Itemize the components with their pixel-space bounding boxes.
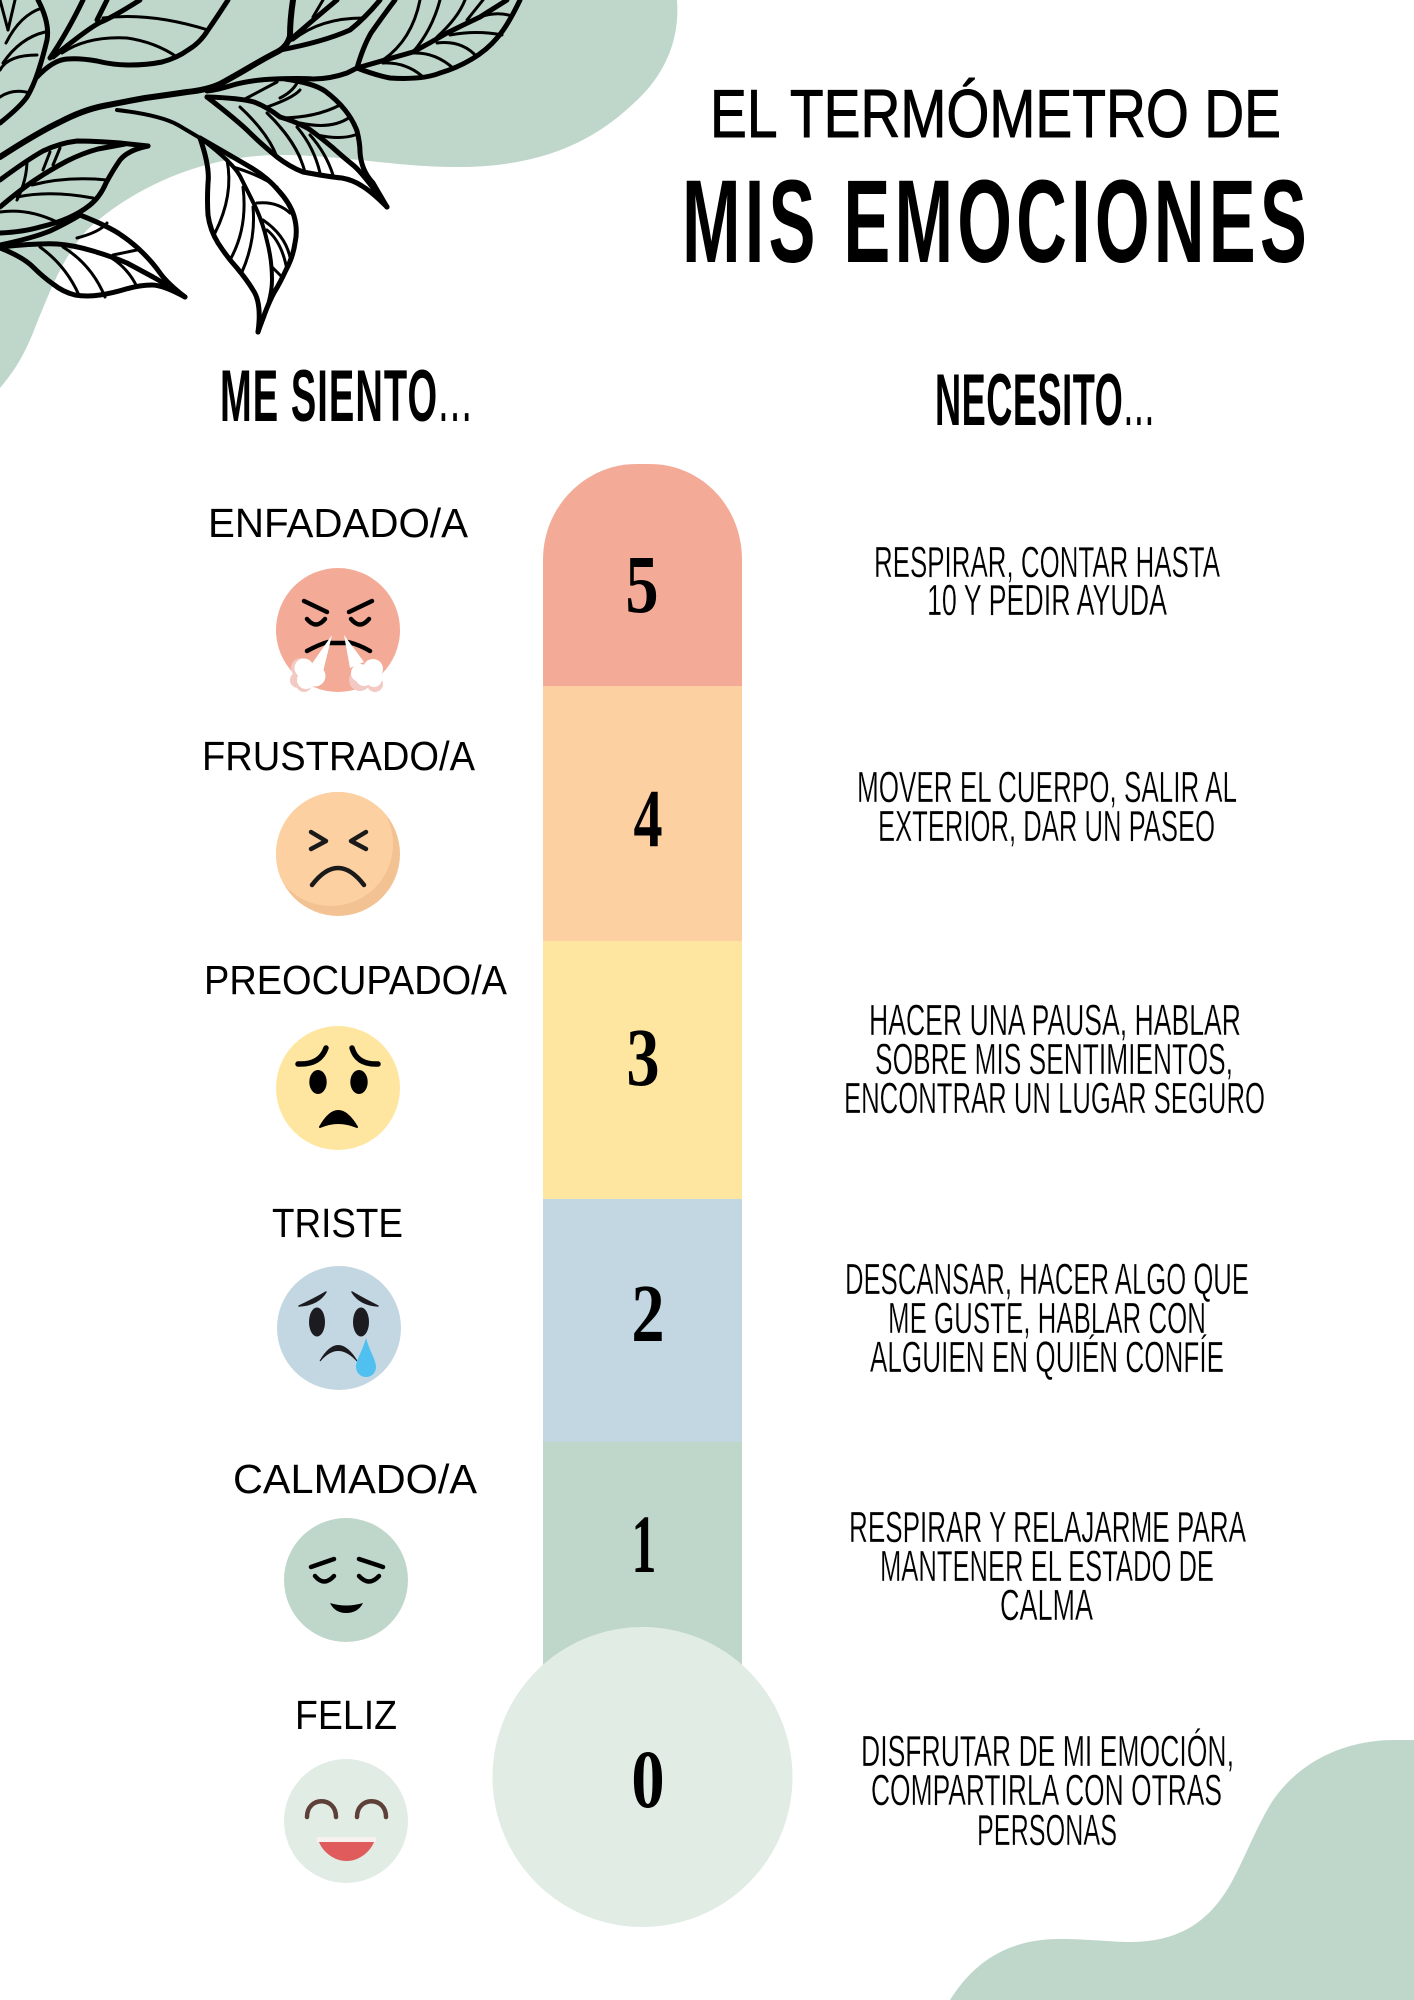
row: feliz: [284, 1692, 408, 1883]
number 0: 0: [631, 1734, 665, 1826]
leaf illustration: [0, 0, 520, 332]
number 2: 2: [631, 1268, 665, 1360]
text: need level 0: [861, 1727, 1234, 1855]
level 5 band: [543, 464, 742, 686]
text: need level 2: [845, 1255, 1249, 1382]
number 1: 1: [632, 1498, 656, 1590]
row: preocupado: [204, 957, 508, 1150]
label: PREOCUPADO/A: [204, 957, 508, 1003]
number 3: 3: [626, 1012, 660, 1104]
icon: calm face: [284, 1518, 408, 1642]
text: need level 4: [857, 763, 1237, 851]
icon: sad face: [277, 1266, 401, 1390]
text: need level 1: [849, 1503, 1246, 1630]
heading: me siento: ME SIENTO...: [220, 356, 473, 437]
label: ENFADADO/A: [208, 500, 469, 546]
row: frustrado: [202, 733, 476, 916]
level 3 band: [543, 941, 742, 1199]
level 1 band: [543, 1442, 742, 1682]
row: triste: [272, 1200, 403, 1390]
number 5: 5: [625, 539, 659, 631]
title: [682, 76, 1311, 288]
row: calmado: [233, 1456, 478, 1642]
icon: happy face: [284, 1759, 408, 1883]
label: FRUSTRADO/A: [202, 733, 476, 779]
label: FELIZ: [295, 1692, 397, 1738]
label: TRISTE: [272, 1200, 403, 1246]
text: need level 5: [874, 538, 1220, 625]
thermometer: [492, 464, 792, 1927]
green blob top-left: [0, 0, 677, 388]
thermometer bulb: [492, 1627, 792, 1927]
text: need level 5: 10 Y PEDIR AYUDA: [927, 576, 1167, 625]
icon: worried face: [276, 1026, 400, 1150]
heading: necesito: NECESITO...: [935, 360, 1155, 441]
text: need level 3: [844, 996, 1265, 1123]
title line 1: EL TERMÓMETRO DE: [710, 76, 1281, 152]
level 2 band: [543, 1199, 742, 1442]
label: CALMADO/A: [233, 1456, 478, 1502]
text: need level 1: CALMA: [1000, 1581, 1093, 1630]
green blob bottom-right: [950, 1740, 1414, 2000]
text: need level 0: PERSONAS: [977, 1806, 1117, 1855]
icon: angry face: [276, 568, 400, 692]
icon: frustrated face: [276, 792, 400, 916]
text: need level 2: ME GUSTE, HABLAR CON: [888, 1294, 1206, 1343]
row: enfadado: [208, 500, 469, 692]
level 4 band: [543, 686, 742, 941]
number 4: 4: [633, 773, 663, 865]
